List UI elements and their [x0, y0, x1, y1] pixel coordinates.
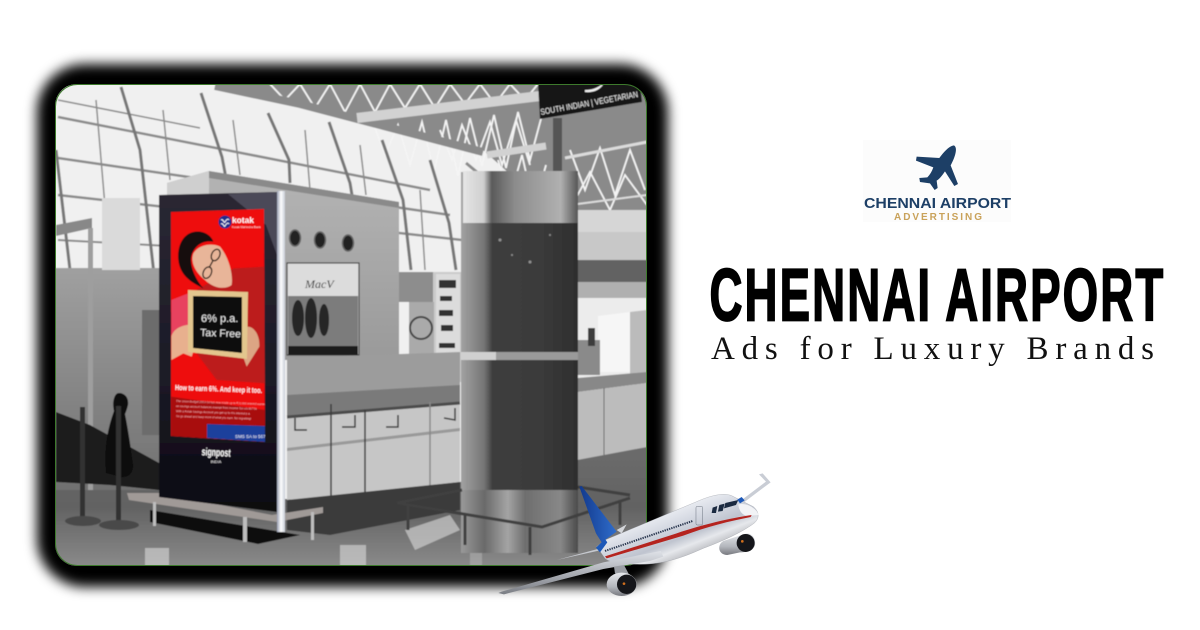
title: CHENNAI AIRPORT — [710, 254, 1165, 337]
signpost logo: signpost — [201, 446, 231, 460]
signpost logo — [201, 446, 231, 464]
ad screen — [170, 208, 269, 443]
window mullions — [56, 87, 478, 283]
ad body text: With a Kotak Savings Account you get up to 6% interest p.a. — [176, 409, 251, 416]
cabin windows — [605, 521, 693, 551]
MacV poster — [287, 263, 359, 355]
digital signage kiosk — [159, 191, 285, 532]
hanging sign: south indian vegetarian: SOUTH INDIAN | VEGETARIAN — [540, 89, 639, 117]
floor — [55, 447, 647, 566]
far wing — [742, 473, 771, 502]
right counter — [578, 372, 647, 463]
center back wall — [167, 171, 399, 360]
hands — [170, 324, 194, 361]
chalkboard: 6% p.a. — [201, 313, 238, 325]
icon: navy plane — [916, 145, 958, 190]
column guard rail — [397, 487, 630, 555]
ad body text: The Union Budget 2013-14 has now made up to ₹10,000 interest earned — [176, 399, 267, 406]
photo green outline — [56, 84, 646, 566]
person — [105, 393, 133, 477]
kotak logo: Kotak Mahindra Bank — [232, 225, 261, 229]
hanging sign pole — [553, 118, 562, 172]
shirt — [170, 267, 265, 383]
roof beam — [215, 86, 483, 152]
door — [696, 506, 703, 525]
left wall — [55, 268, 160, 493]
signpost logo: INDIA — [211, 459, 222, 464]
ceiling trusses — [226, 85, 647, 210]
tail fin — [579, 486, 617, 542]
ad headline: How to earn 6%. And keep it too. — [175, 383, 262, 395]
ad body text: So go ahead and keep more of what you earn. No regretting! — [176, 414, 252, 421]
cockpit windows — [712, 497, 745, 513]
logo: chennai airport advertising — [863, 140, 1011, 223]
subtitle: Ads for Luxury Brands — [711, 331, 1154, 367]
hair — [178, 232, 213, 288]
panel: airport photo — [55, 84, 647, 566]
cheatline stripe — [605, 515, 752, 558]
photo frame shadow — [37, 64, 668, 587]
illustration: airplane — [492, 473, 771, 596]
kotak logo: kotak — [232, 215, 254, 225]
logo wordmark: CHENNAI AIRPORT — [864, 196, 1011, 212]
logo subline: ADVERTISING — [894, 212, 982, 223]
floor reflections — [145, 515, 482, 566]
white cylinder post — [102, 198, 140, 270]
wall camera arm — [56, 218, 92, 236]
escalator — [56, 412, 159, 490]
back display panel on left — [142, 310, 159, 435]
face — [192, 245, 232, 288]
ad body text — [176, 399, 267, 421]
near engine — [607, 565, 637, 596]
center counter — [287, 352, 460, 535]
tail root — [596, 539, 607, 552]
ad body text: on savings account balances exempt from Income Tax u/s 80TTA — [176, 404, 257, 411]
near wing — [492, 551, 663, 594]
chalkboard: Tax Free — [200, 327, 241, 340]
MacV poster: MacV — [304, 277, 335, 291]
fuselage — [597, 494, 758, 564]
column — [461, 171, 578, 553]
pole — [88, 228, 93, 490]
nose highlight — [738, 504, 759, 516]
stanchions — [65, 406, 139, 530]
kiosk base shelf — [127, 493, 323, 544]
kotak logo — [218, 215, 261, 229]
tailplane — [557, 548, 602, 560]
right engine — [719, 533, 755, 555]
ad screen: SMS SA to 5676 — [235, 434, 269, 439]
banner stand — [399, 272, 461, 382]
glasses — [201, 248, 222, 280]
window wall background — [55, 84, 646, 500]
blue corner patch — [207, 424, 265, 442]
wall speaker holes — [290, 230, 354, 251]
white ceiling girders — [357, 96, 546, 155]
right mezzanine — [576, 210, 647, 378]
chalkboard — [188, 290, 248, 359]
